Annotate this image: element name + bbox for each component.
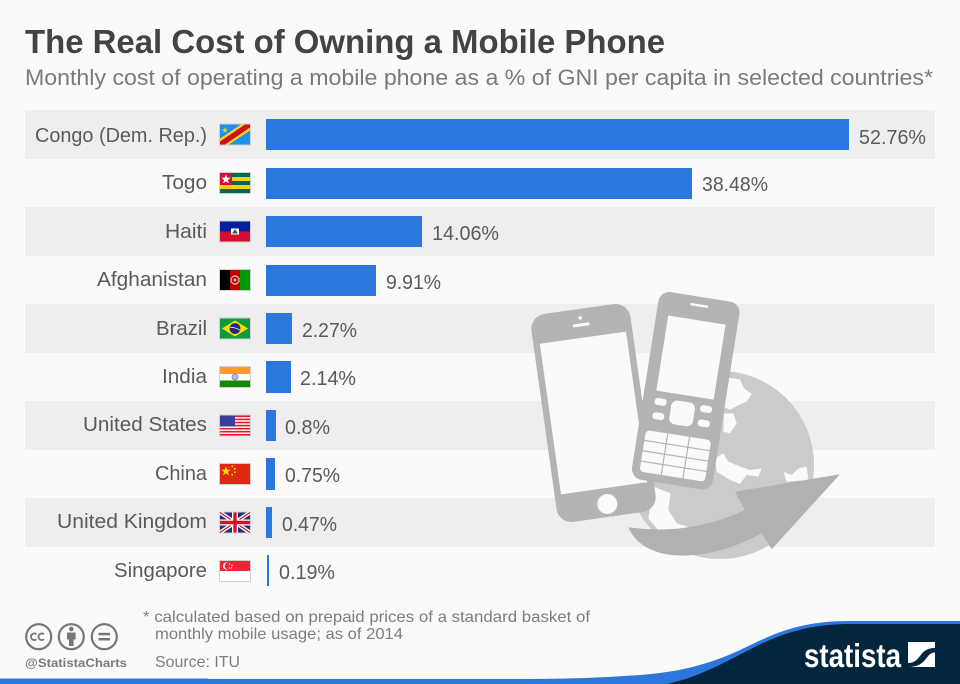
row: Congo: Congo (Dem. Rep.) (35, 125, 207, 147)
row: Congo (35, 119, 926, 150)
row: Togo (162, 168, 768, 199)
icon: flag China (219, 463, 251, 485)
row: Brazil: 2.27% (302, 320, 357, 342)
row: India: India (162, 366, 208, 388)
row: Afghanistan: Afghanistan (97, 269, 207, 291)
footnote (143, 609, 591, 643)
icon: flag Haiti (219, 220, 251, 242)
row: Afghanistan: 9.91% (386, 272, 441, 294)
row: China: 0.75% (285, 465, 340, 487)
row: Singapore (114, 555, 335, 586)
row: United States: 0.8% (285, 417, 330, 439)
footnote: monthly mobile usage; as of 2014 (155, 626, 403, 643)
icon: flag India (219, 366, 251, 388)
social handle: @StatistaCharts (25, 656, 127, 670)
icon: flag United Kingdom (219, 512, 251, 534)
row: Brazil: Brazil (156, 318, 207, 340)
row: Togo: 38.48% (702, 174, 768, 196)
icon: flag Togo (219, 172, 251, 194)
source: Source: ITU (155, 654, 240, 671)
row: Togo: Togo (162, 172, 207, 194)
icon: creative commons licence (26, 624, 117, 649)
footnote: * calculated based on prepaid prices of a standard basket of (143, 609, 591, 626)
icon: feature phone (630, 290, 741, 491)
footer banner (0, 621, 960, 684)
title: The Real Cost of Owning a Mobile Phone (25, 23, 665, 60)
icon: flag Afghanistan (219, 269, 251, 291)
row: Haiti: 14.06% (432, 223, 499, 245)
icon: flag Congo (219, 124, 251, 146)
statista logo mark (908, 642, 935, 667)
row: United Kingdom: United Kingdom (57, 511, 207, 533)
illustration: phones, globe and arrow (529, 290, 840, 559)
row: Haiti (165, 216, 499, 247)
icon: globe (626, 371, 814, 559)
row: Congo: 52.76% (859, 127, 926, 149)
icon: flag Singapore (219, 560, 251, 582)
bar chart (35, 119, 926, 586)
icon: flag Brazil (219, 318, 251, 340)
icon: flag United States (219, 414, 251, 436)
row: China: China (155, 463, 208, 485)
statista wordmark: statista (804, 637, 902, 674)
row: United States (83, 410, 330, 441)
row: United Kingdom (57, 507, 337, 538)
icon: smartphone (529, 302, 658, 524)
row: Brazil (156, 313, 357, 344)
row: Haiti: Haiti (165, 221, 207, 243)
row: India: 2.14% (300, 368, 356, 390)
row: Afghanistan (97, 265, 441, 296)
row: United Kingdom: 0.47% (282, 514, 337, 536)
row: Singapore: Singapore (114, 560, 207, 582)
row: Singapore: 0.19% (279, 562, 335, 584)
row: United States: United States (83, 414, 207, 436)
row: India (162, 361, 356, 393)
subtitle: Monthly cost of operating a mobile phone as a % of GNI per capita in selected countries* (25, 65, 933, 90)
row: China (155, 458, 340, 490)
icon: arrow (628, 474, 840, 556)
